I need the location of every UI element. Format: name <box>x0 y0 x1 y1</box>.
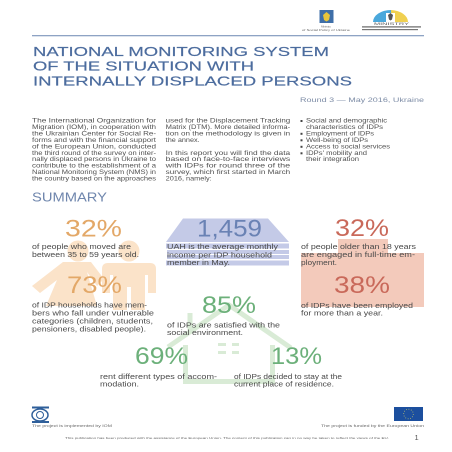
footer: disclaimer: This publication has been produced with the assistance of the European Union. The content of this publication can in no way be taken to reflect the views of the EU. <box>65 436 389 440</box>
stat: 69% rent accommodation <box>100 343 218 389</box>
intro text column 1: the country based on the approaches <box>32 176 156 183</box>
stat: 38% employed over a year: for more than a year. <box>301 308 383 318</box>
icon: IOM logo <box>32 406 49 423</box>
footer: funded by the European Union: The project is funded by the European Union <box>321 424 424 428</box>
stat: 38% employed over a year <box>301 272 413 318</box>
stat: 1,459 UAH average income <box>167 216 278 267</box>
stat: 32% moved aged 35 to 59: 32% <box>65 216 122 242</box>
stat: 69% rent accommodation: 69% <box>135 343 188 370</box>
stat: 32% moved aged 35 to 59: of people who moved are <box>32 242 131 251</box>
stat: 85% satisfied with social environment: of IDPs are satisfied with the <box>167 320 280 329</box>
intro text column 1: Migration (IOM), in cooperation with <box>32 124 157 131</box>
title <box>33 44 352 89</box>
intro text column 1: contribute to the establishment of a <box>32 163 157 170</box>
intro text column 2: In this report you will find the data <box>166 150 291 157</box>
stat: 73% vulnerable households: 73% <box>67 272 122 299</box>
Ministry logo wordmark: MINISTRY <box>374 21 410 26</box>
intro text column 2: 2016, namely: <box>166 176 212 183</box>
stat: 13% decided to stay: of IDPs decided to stay at the <box>234 372 342 381</box>
stat: 13% decided to stay: 13% <box>271 343 322 370</box>
stat: 73% vulnerable households: categories (children, students, <box>32 316 153 325</box>
stat: 1,459 UAH average income: member in May. <box>167 258 230 267</box>
icon: EU flag <box>394 407 423 421</box>
stat: 32% full-time employment: ployment. <box>301 258 337 267</box>
intro text column 2: based on face-to-face interviews <box>166 156 290 163</box>
header logos <box>302 10 421 32</box>
bullet list of report topics: characteristics of IDPs <box>306 124 383 131</box>
stat: 32% full-time employment: of people older than 18 years <box>301 242 416 251</box>
stat: 32% full-time employment: are engaged in full-time em- <box>301 250 416 259</box>
stat: 1,459 UAH average income: 1,459 <box>197 216 262 242</box>
page number: 1 <box>414 433 419 442</box>
intro text column 1: of the European Union, conducted <box>32 143 157 150</box>
stat: 38% employed over a year: 38% <box>334 272 390 299</box>
icon: Ministry arc logo <box>373 10 408 22</box>
stat: 1,459 UAH average income: income per IDP household <box>167 250 272 259</box>
title: OF THE SITUATION WITH <box>33 59 254 74</box>
bullet list of report topics: IDPs' mobility and <box>306 150 368 157</box>
bullet list of report topics: Employment of IDPs <box>306 130 374 137</box>
intro text column 1: the third round of the survey on inter- <box>32 150 156 157</box>
intro text column 1: The International Organization for <box>32 118 156 124</box>
bullet list of report topics <box>300 118 390 163</box>
stat: 1,459 UAH average income: UAH is the average monthly <box>167 242 278 251</box>
stat: 13% decided to stay: current place of residence. <box>234 380 334 389</box>
stat: 73% vulnerable households: pensioners, disabled people). <box>32 324 146 333</box>
stat: 85% satisfied with social environment: social environment. <box>167 328 243 337</box>
stat: 32% moved aged 35 to 59: between 35 to 59 years old. <box>32 250 139 259</box>
icon: salmon building block <box>301 239 424 307</box>
stat: 69% rent accommodation: modation. <box>100 380 139 389</box>
intro text column 2: the annex. <box>166 137 200 144</box>
stat: 73% vulnerable households: of IDP households have mem- <box>32 300 148 309</box>
intro text column 2: used for the Displacement Tracking <box>166 118 291 124</box>
intro text column 1: the Ukrainian Center for Social Re- <box>32 130 156 137</box>
bullet list of report topics: Well-being of IDPs <box>306 137 368 144</box>
intro text column 1: forms and with the financial support <box>32 137 156 144</box>
intro text column 2: with IDPs for round three of the <box>164 163 291 170</box>
footer: implemented by IOM: The project is implemented by IOM <box>32 424 112 428</box>
intro text column 2: survey, which first started in March <box>166 169 291 176</box>
bullet list of report topics: their integration <box>306 156 360 163</box>
stat: 32% moved aged 35 to 59 <box>32 216 139 259</box>
intro text column 1: National Monitoring System (NMS) in <box>32 169 157 176</box>
Ministry of Social Policy caption: Ministry <box>321 24 331 28</box>
subtitle: round and date: Round 3 — May 2016, Ukraine <box>300 97 424 104</box>
Ministry of Social Policy caption: of Social Policy of Ukraine <box>302 28 351 32</box>
stat: 38% employed over a year: of IDPs have been employed <box>301 301 413 310</box>
intro text column 2: tion on the methodology is given in <box>166 130 291 137</box>
stat: 32% full-time employment <box>301 215 416 267</box>
icon: house outline <box>168 305 291 382</box>
stat: 32% full-time employment: 32% <box>335 215 389 242</box>
Ministry of Social Policy caption <box>302 24 351 32</box>
intro text column 1: nally displaced persons in Ukraine to <box>32 156 157 163</box>
stat: 13% decided to stay <box>234 343 342 389</box>
intro text column 1 <box>32 118 157 183</box>
stat: 85% satisfied with social environment: 85% <box>202 292 256 319</box>
stat: 85% satisfied with social environment <box>167 292 280 337</box>
icon: Ministry of Social Policy emblem <box>320 10 334 23</box>
stat: 73% vulnerable households: bers who fall under vulnerable <box>32 308 154 318</box>
stat: 73% vulnerable households <box>32 272 154 333</box>
stat: 69% rent accommodation: rent different types of accom- <box>100 372 218 381</box>
icon: stacked banknote pyramid <box>166 218 289 266</box>
bullet list of report topics: Social and demographic <box>306 118 387 124</box>
intro text column 2 <box>164 118 291 183</box>
title: INTERNALLY DISPLACED PERSONS <box>33 74 352 89</box>
intro text column 2: Matrix (DTM). More detailed informa- <box>166 124 290 131</box>
title: NATIONAL MONITORING SYSTEM <box>33 44 329 59</box>
bullet list of report topics: Access to social services <box>306 143 390 150</box>
icon: woman and man figures <box>32 240 156 310</box>
heading: summary: SUMMARY <box>32 190 108 204</box>
